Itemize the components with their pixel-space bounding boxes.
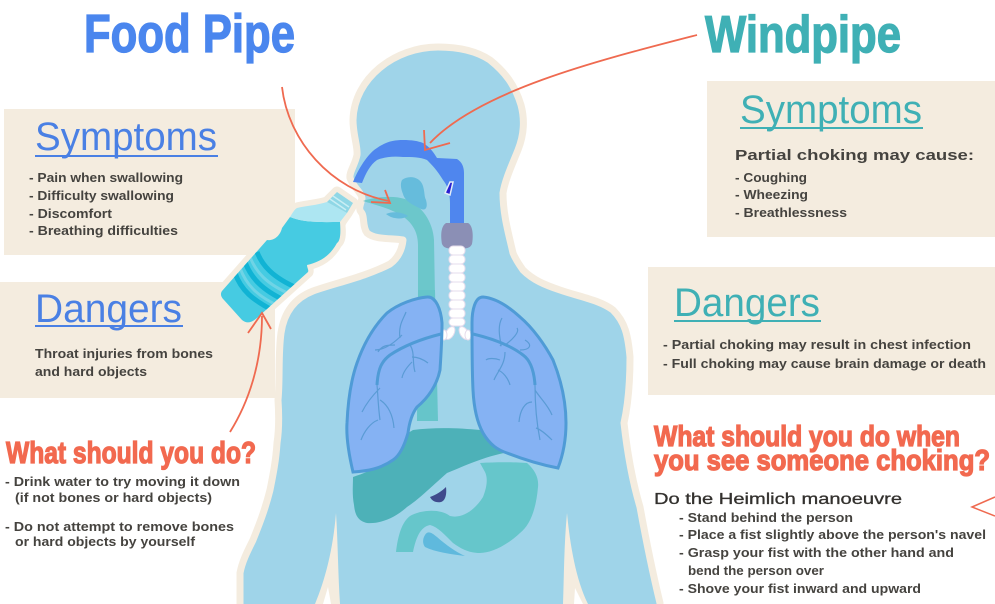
stomach: [396, 462, 538, 553]
left armpit gap: [315, 513, 340, 604]
text: food pipe symptoms list: [29, 171, 183, 238]
arrow: food pipe to mouth: [282, 87, 390, 203]
text: heimlich manoeuvre steps: bend the person over: [688, 564, 824, 578]
liver: [353, 428, 504, 523]
icon: water bottle: [221, 192, 353, 322]
panel: food pipe dangers background: [0, 282, 275, 398]
text: windpipe dangers: - Partial choking may result in chest infection: [663, 338, 971, 352]
panel: windpipe symptoms background: [707, 81, 995, 237]
arrow: windpipe to airway: [424, 35, 697, 150]
text: windpipe dangers: [663, 338, 986, 371]
text: heimlich manoeuvre steps: Do the Heimlich manoeuvre: [654, 491, 902, 508]
arrow: points to bottle: [230, 313, 271, 432]
text: what to do list: (if not bones or hard objects): [15, 491, 212, 505]
text: heimlich manoeuvre steps: - Grasp your fist with the other hand and: [679, 546, 954, 560]
text: food pipe symptoms list: - Pain when swallowing: [29, 171, 183, 185]
arrow: heimlich pointer: [972, 497, 995, 516]
panel: windpipe dangers background: [648, 267, 995, 395]
text: heimlich manoeuvre steps: - Place a fist slightly above the person's navel: [679, 528, 986, 542]
title: Food Pipe: Food Pipe: [84, 4, 295, 64]
gallbladder: [430, 487, 446, 502]
heading: food pipe dangers: Dangers: [35, 287, 182, 331]
text: what to do list: or hard objects by yourself: [15, 535, 196, 549]
trachea rings: [441, 246, 471, 341]
text: what to do list: [5, 475, 240, 549]
text: heimlich manoeuvre steps: - Shove your fist inward and upward: [679, 582, 921, 596]
right lung: [472, 297, 566, 468]
text: food pipe dangers: and hard objects: [35, 365, 147, 379]
text: windpipe symptoms list: - Wheezing: [735, 188, 808, 202]
text: food pipe symptoms list: - Difficulty swallowing: [29, 189, 174, 203]
text: heimlich manoeuvre steps: - Stand behind the person: [679, 511, 853, 525]
pancreas: [423, 532, 465, 556]
heading: windpipe symptoms: Symptoms: [740, 88, 922, 132]
text: food pipe symptoms list: - Breathing difficulties: [29, 224, 178, 238]
text: food pipe symptoms list: - Discomfort: [29, 207, 113, 221]
left lung: [347, 297, 442, 472]
text: food pipe dangers: Throat injuries from bones: [35, 347, 213, 361]
text: food pipe dangers: [35, 347, 213, 379]
larynx: [441, 223, 473, 249]
text: what to do list: - Do not attempt to remove bones: [5, 520, 234, 534]
text: windpipe symptoms list: - Coughing: [735, 171, 807, 185]
title: Windpipe: Windpipe: [705, 6, 901, 64]
text: what to do list: - Drink water to try moving it down: [5, 475, 240, 489]
panel: food pipe symptoms background: [4, 109, 295, 255]
epiglottis: [401, 177, 427, 210]
text: heimlich manoeuvre steps: [654, 491, 986, 596]
heading: windpipe dangers: Dangers: [674, 281, 820, 325]
heading: what should you do: What should you do?: [6, 435, 256, 470]
heading: food pipe symptoms: Symptoms: [35, 115, 217, 159]
oesophagus: [363, 197, 438, 421]
text: windpipe symptoms list: [735, 147, 974, 220]
text: windpipe symptoms list: Partial choking may cause:: [735, 147, 974, 164]
human body silhouette: [240, 47, 661, 604]
right armpit gap: [563, 513, 588, 604]
throat valve: [445, 182, 453, 195]
text: windpipe symptoms list: - Breathlessness: [735, 206, 847, 220]
heading: what to do when someone chokes: [654, 421, 990, 477]
text: windpipe dangers: - Full choking may cause brain damage or death: [663, 357, 986, 371]
windpipe airway: [353, 140, 464, 224]
